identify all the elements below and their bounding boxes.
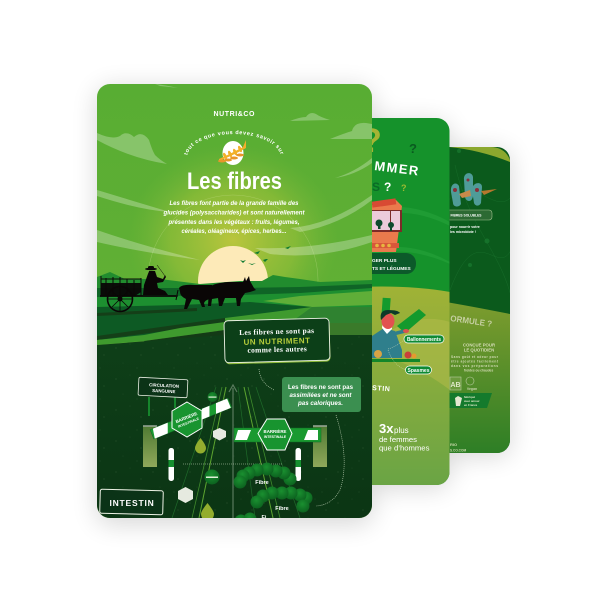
heading: intestin: STIN [372, 385, 391, 393]
icon: organic labels: AB [450, 382, 461, 389]
ox front [208, 276, 256, 306]
heading: conçue pour le quotidien: LE QUOTIDIEN [464, 348, 494, 352]
heading: formule: ORMULE ? [450, 313, 493, 329]
closed barrier with hexagon sign: BARRIÈRE [264, 429, 287, 434]
icon: wheat [218, 140, 246, 165]
icon: organic labels [450, 377, 477, 391]
fibre cluster middle [250, 486, 312, 512]
text: microbiote: les microbiote ! [450, 230, 476, 234]
badge: fabriqué en France: fabriqué [464, 395, 475, 399]
badge: fabriqué en France: avec amour [464, 399, 480, 403]
intro text: glucides (polysaccharides) et sont naturellement [163, 210, 305, 216]
drop shadows [97, 88, 510, 524]
open barrier with hexagon sign [150, 398, 232, 439]
heading: consommer: MMER [374, 158, 420, 178]
text: footer brand [450, 444, 466, 452]
fibre cluster bottom [234, 512, 267, 528]
text: microbiote [450, 226, 480, 233]
ox rear [176, 284, 212, 309]
icon: dancing bacteria [451, 173, 497, 207]
intro text: céréales, oléagineux, épices, herbes... [182, 228, 287, 235]
illustration: slot machine [372, 198, 402, 252]
heading: consommer: S [372, 180, 380, 194]
right gate pillar [313, 426, 327, 467]
panel: digestive section [372, 286, 450, 485]
illustration: man with stomach pain [372, 310, 420, 362]
striped posts [168, 448, 301, 481]
cart [100, 276, 176, 312]
dotted connector lines [183, 369, 344, 506]
text: footer brand: RIO [450, 442, 457, 447]
text: goût et odeur [451, 356, 498, 372]
callout: un nutriment: comme les autres [247, 344, 307, 355]
callout: assimilées: Les fibres ne sont pas [288, 384, 353, 391]
callout: un nutriment [224, 318, 331, 364]
label: fibre: Fibre [275, 506, 289, 512]
icon: question marks: ? [401, 183, 406, 193]
silhouette: farmer, cart and oxen [100, 265, 256, 312]
intro text: Les fibres font partie de la grande famille des [170, 200, 299, 207]
stat: 3x plus de femmes que d'hommes: plus [394, 426, 409, 435]
title: Les fibres [187, 168, 282, 195]
open barrier with hexagon sign: BARRIÈRE [175, 411, 198, 424]
text: footer brand: S.CO.COM [450, 448, 466, 452]
stat: 3x plus de femmes que d'hommes: de femmes [379, 435, 417, 444]
panel: front card [97, 84, 372, 518]
label: fibre: Fibre [255, 480, 269, 486]
fibre cluster top [234, 462, 296, 488]
text: goût et odeur: froides ou chaudes [464, 368, 493, 372]
badge: fabriqué en France [449, 393, 492, 408]
left gate pillar [143, 426, 157, 467]
intro text: présentes dans les végétaux : fruits, légumes, [168, 219, 300, 226]
sun [198, 246, 268, 284]
panel: middle card [372, 118, 450, 485]
label: ballonnements [404, 335, 444, 343]
callout: assimilées: pas caloriques. [297, 400, 343, 407]
heading: conçue pour le quotidien [463, 344, 495, 352]
panel: formula section [450, 302, 510, 453]
text: microbiote: pour nourrir votre [450, 225, 480, 229]
icon: organic labels: Vegan [467, 387, 477, 391]
heading: consommer: ? [384, 180, 391, 194]
closed barrier with hexagon sign: INTESTINALE [264, 435, 287, 439]
icon: question marks: ? [361, 122, 382, 160]
text: goût et odeur: Sans goût et odeur pour [451, 355, 499, 359]
brand: NUTRI&CO: NUTRI&CO [214, 111, 255, 118]
farmer [143, 265, 168, 295]
pill: manger plus de fruits et légumes: TS ET LÉGUMES [372, 264, 411, 272]
arc heading: tout ce que vous devez savoir sur [184, 130, 284, 155]
intro text [163, 200, 305, 235]
sign: circulation sanguine: SANGUINE [152, 388, 176, 394]
sign: circulation sanguine [138, 377, 188, 416]
label: spasmes [406, 366, 432, 374]
stat: 3x plus de femmes que d'hommes [379, 424, 430, 452]
icon: broccoli [376, 220, 394, 231]
text: goût et odeur: dans vos préparations [451, 364, 498, 368]
pill: fibres solubles [440, 210, 492, 220]
landscape hills and fields [97, 272, 372, 346]
label: ballonnements: Ballonnements [407, 337, 441, 343]
icon: question marks [372, 128, 416, 191]
nutrient characters [178, 392, 226, 521]
stat: 3x plus de femmes que d'hommes: 3x [379, 421, 394, 436]
label: intestin [100, 489, 163, 515]
label: intestin: INTESTIN [109, 498, 155, 508]
birds [240, 246, 291, 265]
badge: fabriqué en France: en France [464, 403, 478, 407]
pill: manger plus de fruits et légumes: GER PLUS [372, 258, 397, 264]
dark ground [97, 335, 372, 518]
callout: assimilées [282, 377, 361, 412]
closed barrier with hexagon sign [234, 419, 321, 450]
text: goût et odeur: être ajoutés facilement [451, 360, 499, 364]
callout: un nutriment: Les fibres ne sont pas [239, 326, 314, 337]
pill: fibres solubles: FIBRES SOLUBLES [451, 214, 482, 218]
open barrier with hexagon sign: INTESTINALE [177, 416, 200, 429]
road lines [172, 385, 300, 518]
icon: question marks: ? [409, 141, 417, 156]
clouds [97, 84, 372, 260]
callout: un nutriment: UN NUTRIMENT [243, 336, 311, 347]
heading: consommer [372, 161, 418, 191]
callout: assimilées: assimilées et ne sont [290, 392, 352, 399]
label: fibre: Fi [262, 515, 267, 521]
sign: circulation sanguine: CIRCULATION [149, 382, 179, 389]
label: spasmes: Spasmes [408, 368, 430, 374]
stat: 3x plus de femmes que d'hommes: que d’hommes [379, 444, 430, 452]
pill: manger plus de fruits et légumes [372, 253, 416, 274]
heading: conçue pour le quotidien: CONÇUE POUR [463, 342, 496, 348]
panel: back card [450, 147, 510, 453]
